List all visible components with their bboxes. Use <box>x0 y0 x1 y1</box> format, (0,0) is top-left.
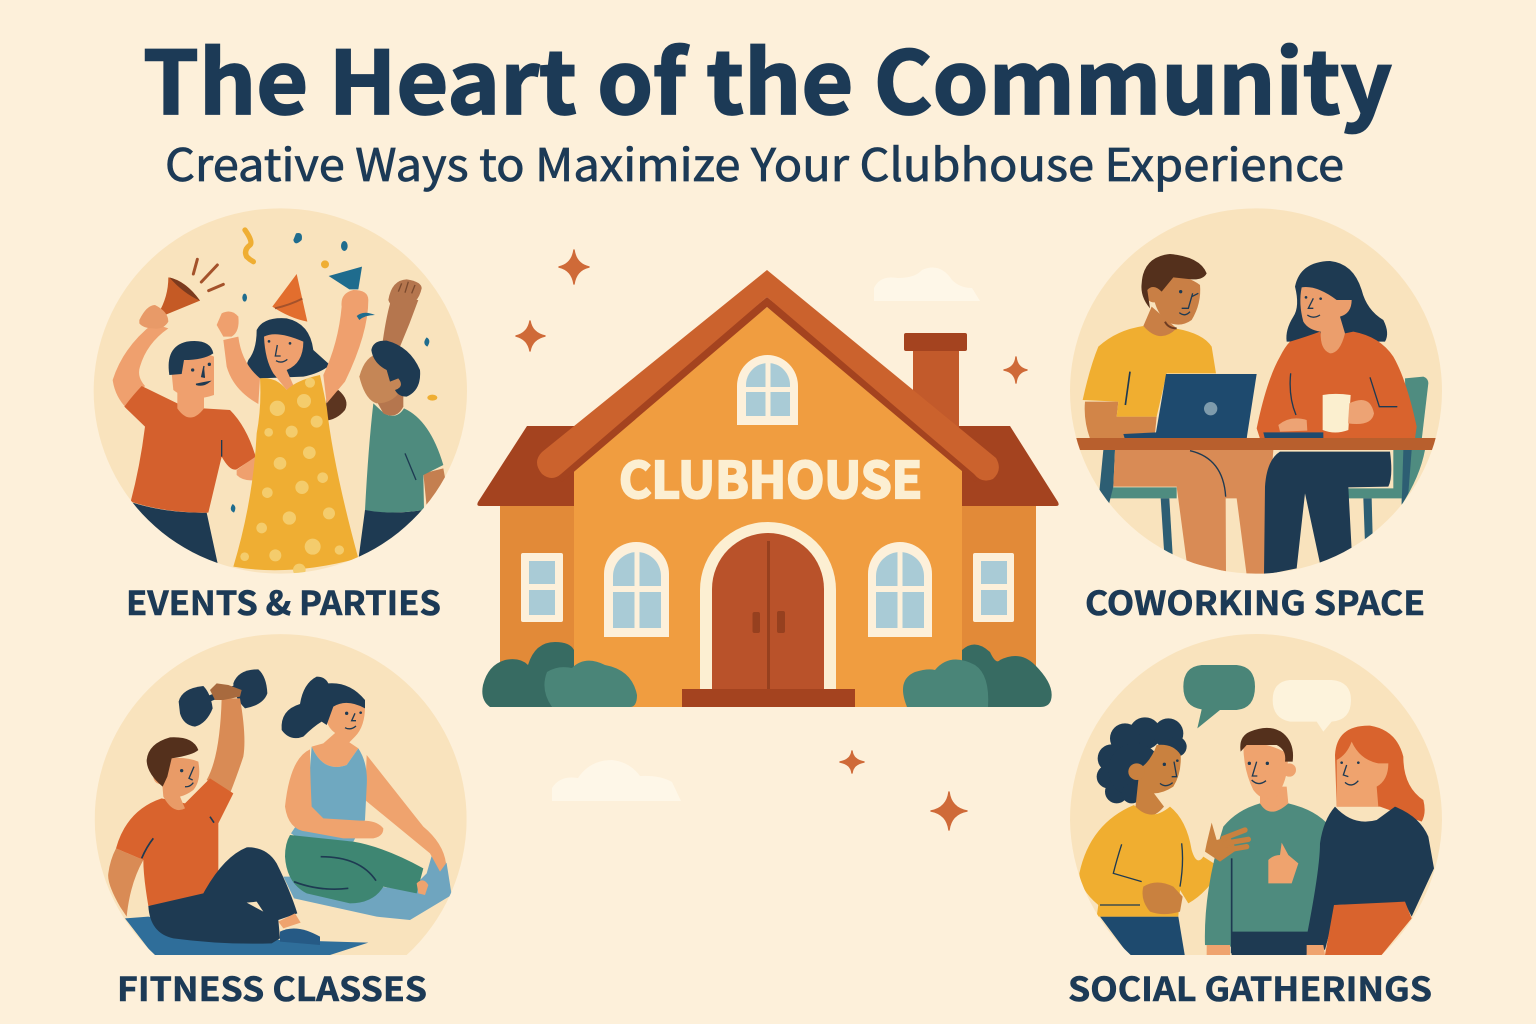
cloud top right <box>874 268 980 301</box>
man <box>108 683 320 945</box>
door step <box>682 689 855 707</box>
events illustration <box>94 208 467 577</box>
social illustration <box>1060 630 1450 963</box>
bushes <box>482 642 1052 707</box>
left woman <box>1079 717 1222 957</box>
right woman <box>1305 726 1434 955</box>
man <box>1083 254 1273 575</box>
middle man <box>1205 728 1330 955</box>
panel: events and parties <box>94 208 467 625</box>
brown back hair <box>325 390 346 421</box>
fitness illustration <box>90 630 480 963</box>
speech bubble cream <box>1273 680 1351 732</box>
title: The Heart of the Community <box>143 14 1392 140</box>
woman <box>1257 261 1417 439</box>
main roof <box>537 270 999 482</box>
light mat <box>283 850 452 920</box>
woman stretching <box>282 677 446 903</box>
arched windows <box>604 542 932 637</box>
gesture hand <box>1205 823 1248 862</box>
horn <box>139 259 223 329</box>
decorative stars <box>516 250 1027 830</box>
woman <box>217 267 375 576</box>
side walls <box>500 506 1036 707</box>
fitness label: FITNESS CLASSES <box>117 963 427 1011</box>
central clubhouse illustration <box>477 270 1059 707</box>
side windows <box>521 553 1014 622</box>
chimney <box>904 333 967 440</box>
coworking label: COWORKING SPACE <box>1085 577 1425 625</box>
building sign text: CLUBHOUSE <box>619 441 922 513</box>
panel: social gatherings <box>1060 630 1450 1011</box>
panel: coworking space <box>1070 208 1442 625</box>
attic window <box>737 355 798 425</box>
side roofs <box>477 426 1059 506</box>
social label: SOCIAL GATHERINGS <box>1068 963 1432 1011</box>
subtitle: Creative Ways to Maximize Your Clubhouse Experience <box>165 129 1344 194</box>
table <box>1075 438 1436 450</box>
dark mat <box>125 917 368 955</box>
dumbbell <box>179 669 267 727</box>
arched door <box>700 522 836 692</box>
woman legs <box>1264 452 1391 575</box>
panel: fitness classes <box>90 630 480 1011</box>
events label: EVENTS & PARTIES <box>126 577 441 625</box>
chairs <box>1099 377 1428 555</box>
speech bubble teal <box>1183 665 1255 728</box>
laptop <box>1123 374 1257 439</box>
left man <box>113 323 256 577</box>
cloud bottom <box>552 760 681 801</box>
right man <box>358 279 447 560</box>
main gable wall <box>574 307 962 707</box>
confetti <box>231 230 437 513</box>
coworking illustration <box>1070 208 1442 575</box>
